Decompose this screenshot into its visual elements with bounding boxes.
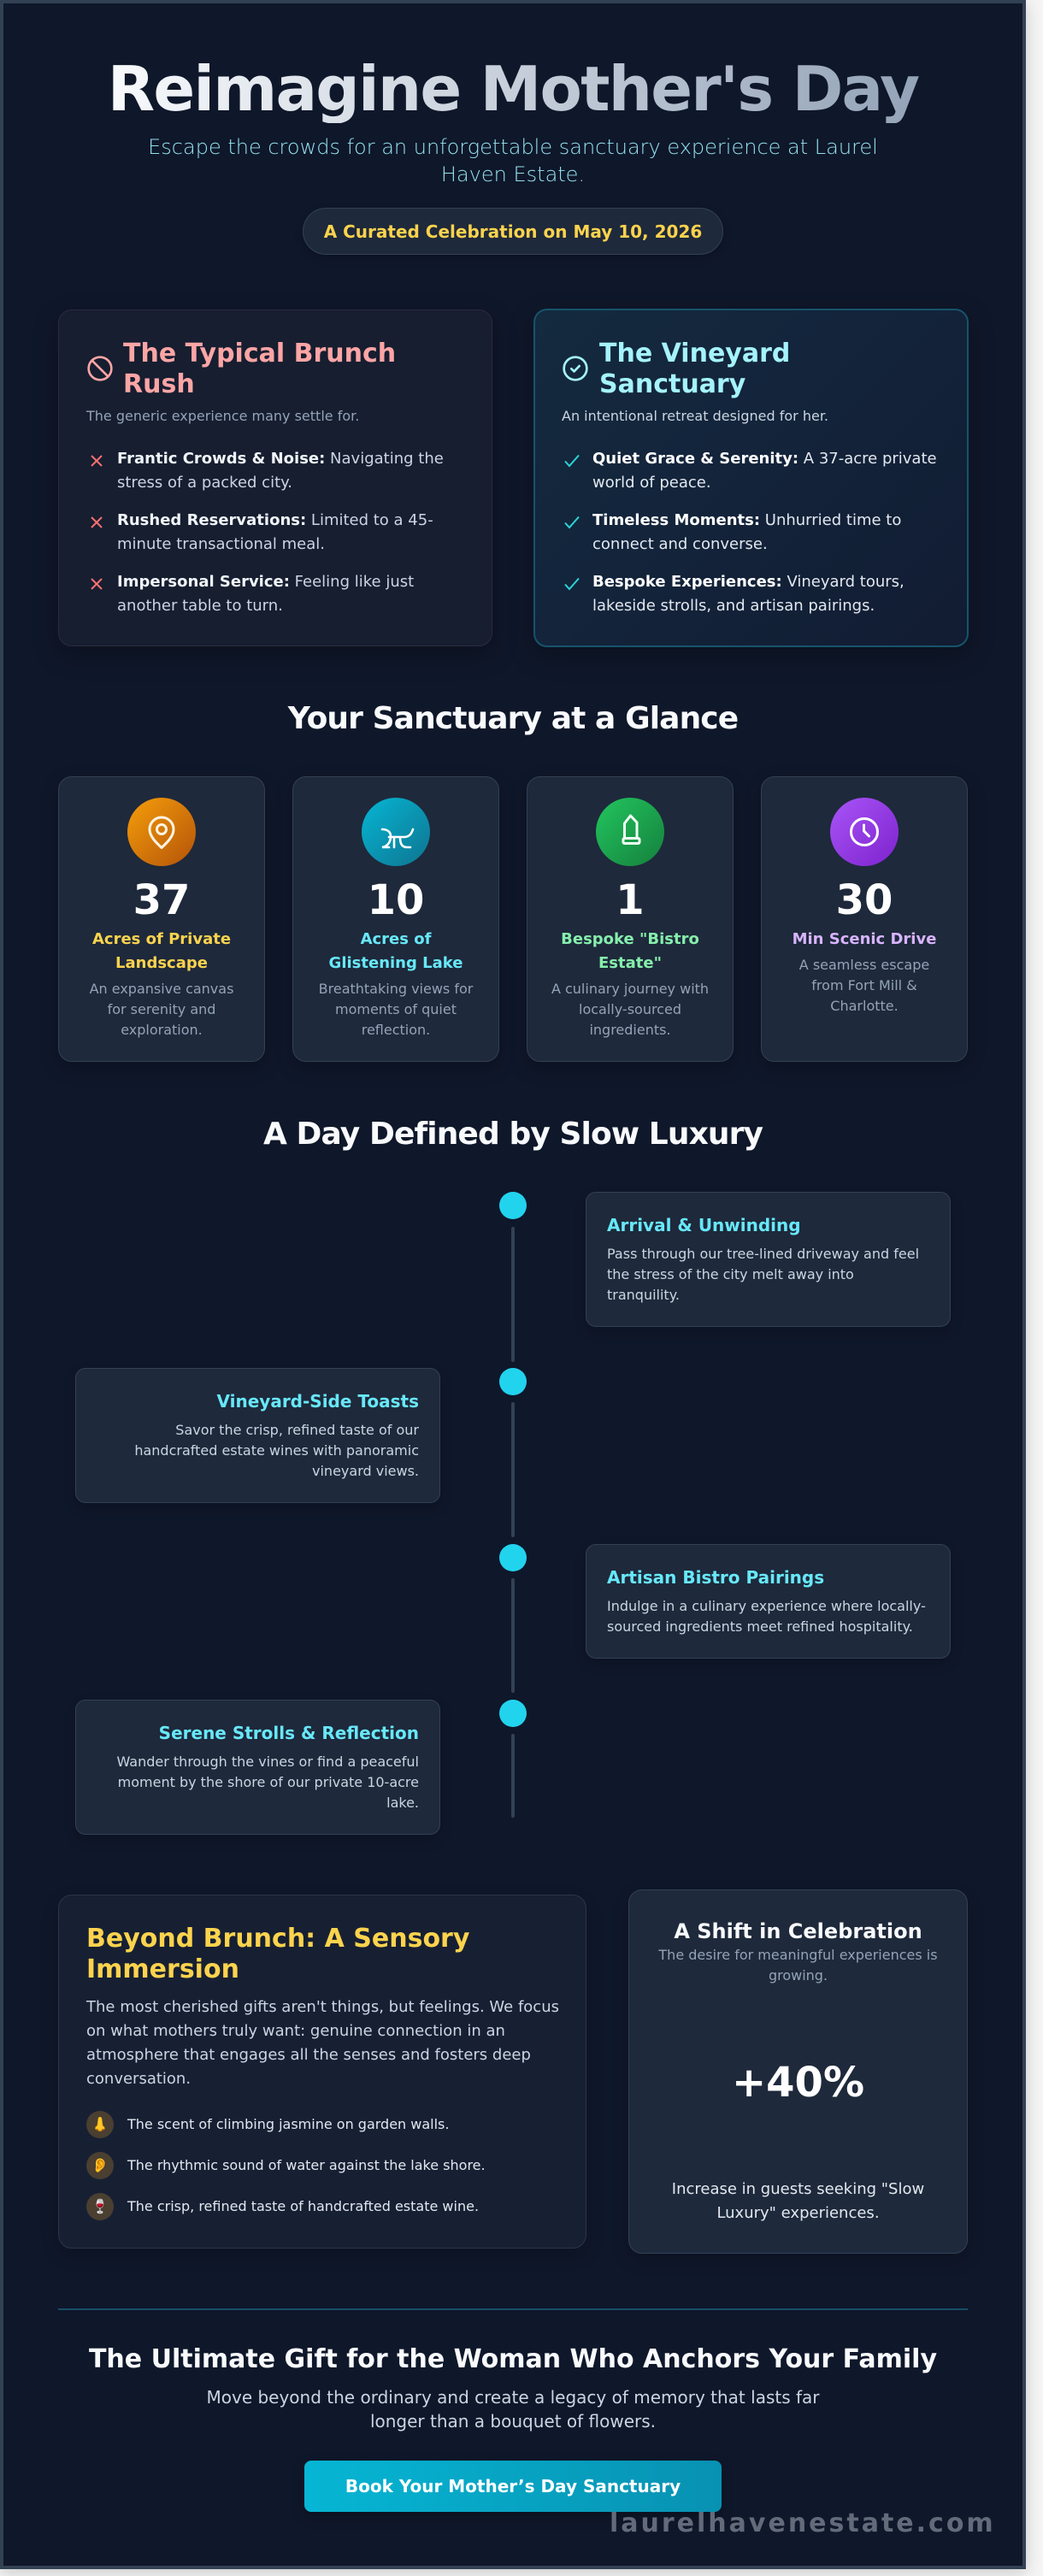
label: Estate" xyxy=(598,954,662,972)
description: locally-sourced xyxy=(579,1001,681,1017)
list item: crowds: Frantic Crowds & Noise: Navigating the xyxy=(117,450,444,468)
description xyxy=(319,981,474,1038)
timeline line 2 xyxy=(511,1402,515,1537)
title: Reimagine Mother's Day xyxy=(108,53,918,125)
label xyxy=(329,930,463,972)
heading: vineyard sanctuary xyxy=(599,339,790,399)
subheading: The generic experience many settle for. xyxy=(86,408,359,424)
step text: the stress of the city melt away into xyxy=(607,1266,854,1282)
icon: bottle xyxy=(596,798,664,866)
number: 30 xyxy=(836,876,893,924)
subtitle: Haven Estate. xyxy=(441,162,585,186)
paragraph: on what mothers truly want: genuine connection in an xyxy=(86,2022,505,2040)
icon: cross 2 xyxy=(91,516,103,528)
step text xyxy=(607,1598,926,1635)
subheading: growing. xyxy=(769,1967,828,1984)
list item: service: Impersonal Service: Feeling like just xyxy=(117,573,414,591)
list item: grace: Quiet Grace & Serenity: A 37-acre private xyxy=(592,450,937,468)
sense: taste: The crisp, refined taste of handcrafted estate wine. xyxy=(127,2198,479,2214)
subheading xyxy=(658,1947,938,1984)
list item: experiences: lakeside strolls, and artisan pairings. xyxy=(592,597,875,615)
timeline line 4 xyxy=(511,1734,515,1818)
icon: tick 1 xyxy=(564,455,580,467)
heading: your sanctuary at a glance: Your Sanctuary at a Glance xyxy=(288,701,738,736)
timeline spine xyxy=(499,1192,527,1818)
icon: check circle xyxy=(563,356,588,381)
step text: tranquility. xyxy=(607,1287,680,1303)
watermark: laurelhavenestate.com xyxy=(610,2508,996,2538)
icon: ear: 👂 xyxy=(91,2157,109,2173)
stat caption xyxy=(672,2180,924,2222)
description: Breathtaking views for xyxy=(319,981,473,997)
timeline line 1 xyxy=(511,1227,515,1362)
description: An expansive canvas xyxy=(90,981,233,997)
timeline card: toasts xyxy=(75,1368,440,1503)
icon: clock xyxy=(830,798,899,866)
list item: crowds xyxy=(117,450,444,492)
icon: tick 3 xyxy=(564,578,580,590)
sense: scent: The scent of climbing jasmine on garden walls. xyxy=(127,2116,449,2132)
timeline dot 2 xyxy=(499,1368,527,1395)
icon: ban xyxy=(87,356,113,381)
description xyxy=(799,957,929,1014)
paragraph xyxy=(85,1998,559,2088)
subheading: The desire for meaningful experiences is xyxy=(658,1947,938,1963)
stat card: 10 acres lake xyxy=(292,776,499,1062)
list item: grace xyxy=(592,450,937,492)
number: 1 xyxy=(616,876,645,924)
step title: Serene Strolls & Reflection xyxy=(159,1723,419,1743)
description: A seamless escape xyxy=(799,957,929,973)
heading: typical brunch xyxy=(123,339,396,399)
list item: service: another table to turn. xyxy=(117,597,283,615)
stat caption: Luxury" experiences. xyxy=(716,2204,880,2222)
description xyxy=(551,981,709,1038)
label: Glistening Lake xyxy=(329,954,463,972)
step text: vineyard views. xyxy=(312,1463,419,1479)
description: moments of quiet xyxy=(335,1001,457,1017)
list item: service xyxy=(117,573,414,615)
call to action button xyxy=(304,2461,722,2512)
description: for serenity and xyxy=(108,1001,215,1017)
step text: Pass through our tree-lined driveway and feel xyxy=(607,1246,919,1262)
step text: Savor the crisp, refined taste of our xyxy=(175,1422,419,1438)
list item: reservations: Rushed Reservations: Limited to a 45- xyxy=(117,511,433,529)
icon: tick 2 xyxy=(564,516,580,528)
list item: reservations xyxy=(117,511,433,553)
icon: nose: 👃 xyxy=(91,2116,109,2132)
timeline line 3 xyxy=(511,1578,515,1693)
icon: map pin xyxy=(127,798,196,866)
date pill: A Curated Celebration on May 10, 2026 xyxy=(324,221,702,241)
big stat: +40% xyxy=(732,2059,864,2107)
heading xyxy=(86,1924,469,1984)
list item: reservations: minute transactional meal. xyxy=(117,535,325,553)
paragraph: conversation. xyxy=(86,2070,191,2088)
footer text: Move beyond the ordinary and create a legacy of memory that lasts far xyxy=(206,2387,820,2408)
label xyxy=(92,930,231,972)
label: Landscape xyxy=(115,954,208,972)
heading: Immersion xyxy=(86,1954,239,1984)
list item: experiences xyxy=(592,573,905,615)
step title: Arrival & Unwinding xyxy=(607,1215,801,1235)
heading: vineyard sanctuary: Sanctuary xyxy=(599,369,745,399)
step text: moment by the shore of our private 10-acre xyxy=(118,1774,419,1790)
label: Acres of xyxy=(361,930,431,948)
icon: lake xyxy=(362,798,430,866)
label: Min Scenic Drive xyxy=(793,930,936,948)
label: Acres of Private xyxy=(92,930,231,948)
timeline dot 3 xyxy=(499,1544,527,1571)
heading: typical brunch: Rush xyxy=(123,369,195,399)
number: 37 xyxy=(133,876,190,924)
panel: the vineyard sanctuary xyxy=(533,309,969,647)
subheading: An intentional retreat designed for her. xyxy=(562,408,828,424)
heading: a day defined by slow luxury: A Day Defined by Slow Luxury xyxy=(263,1117,763,1152)
heading: typical brunch: The Typical Brunch xyxy=(123,339,396,368)
step text xyxy=(607,1246,919,1303)
description: Charlotte. xyxy=(830,998,899,1014)
label xyxy=(561,930,699,972)
timeline dot 1 xyxy=(499,1192,527,1219)
heading: A Shift in Celebration xyxy=(674,1919,922,1943)
icon: cross 1 xyxy=(91,455,103,467)
step text xyxy=(116,1754,419,1811)
list item: moments: Timeless Moments: Unhurried time to xyxy=(592,511,901,529)
list item: grace: world of peace. xyxy=(592,474,711,492)
panel: beyond brunch xyxy=(58,1895,586,2249)
description xyxy=(89,981,233,1038)
description: from Fort Mill & xyxy=(811,977,917,993)
sense: sound: The rhythmic sound of water against the lake shore. xyxy=(127,2157,486,2173)
heading: vineyard sanctuary: The Vineyard xyxy=(599,339,790,368)
step text: Wander through the vines or find a peaceful xyxy=(116,1754,419,1770)
timeline card: pairings xyxy=(586,1544,951,1659)
stat card: 37 acres xyxy=(58,776,265,1062)
list item: experiences: Bespoke Experiences: Vineyard tours, xyxy=(592,573,905,591)
paragraph: atmosphere that engages all the senses and fosters deep xyxy=(86,2046,531,2064)
step text: sourced ingredients meet refined hospitality. xyxy=(607,1618,913,1635)
list item: moments xyxy=(592,511,901,553)
step text: lake. xyxy=(386,1795,419,1811)
footer text xyxy=(206,2387,820,2432)
list item: moments: connect and converse. xyxy=(592,535,768,553)
timeline card: arrival xyxy=(586,1192,951,1327)
step title: Artisan Bistro Pairings xyxy=(607,1567,824,1588)
label: Bespoke "Bistro xyxy=(561,930,699,948)
step title: Vineyard-Side Toasts xyxy=(217,1391,419,1412)
footer heading: The Ultimate Gift for the Woman Who Anchors Your Family xyxy=(89,2344,937,2374)
stat card: 30 min drive xyxy=(761,776,968,1062)
paragraph: The most cherished gifts aren't things, but feelings. We focus xyxy=(86,1998,559,2016)
subtitle xyxy=(148,135,878,186)
number: 10 xyxy=(368,876,424,924)
description: A culinary journey with xyxy=(551,981,709,997)
stat card: 1 bistro xyxy=(527,776,734,1062)
list item: crowds: stress of a packed city. xyxy=(117,474,292,492)
icon: ear xyxy=(86,2152,114,2179)
step text: Indulge in a culinary experience where locally- xyxy=(607,1598,926,1614)
icon: nose xyxy=(86,2111,114,2138)
stat caption: Increase in guests seeking "Slow xyxy=(672,2180,924,2198)
description: ingredients. xyxy=(589,1022,671,1038)
date pill xyxy=(303,208,723,255)
panel: the typical brunch rush xyxy=(58,309,492,646)
panel: a shift in celebration xyxy=(628,1889,968,2254)
step text: handcrafted estate wines with panoramic xyxy=(134,1442,419,1459)
subtitle: Escape the crowds for an unforgettable sanctuary experience at Laurel xyxy=(148,135,878,159)
icon: wine glass xyxy=(86,2193,114,2220)
timeline dot 4 xyxy=(499,1700,527,1727)
heading: Beyond Brunch: A Sensory xyxy=(86,1924,469,1954)
step text xyxy=(134,1422,419,1479)
description: exploration. xyxy=(121,1022,203,1038)
icon: cross 3 xyxy=(91,578,103,590)
footer text: longer than a bouquet of flowers. xyxy=(370,2411,656,2432)
description: reflection. xyxy=(362,1022,430,1038)
timeline card: strolls xyxy=(75,1700,440,1835)
icon: wine glass: 🍷 xyxy=(91,2198,109,2214)
call to action button: Book Your Mother’s Day Sanctuary xyxy=(345,2476,681,2496)
